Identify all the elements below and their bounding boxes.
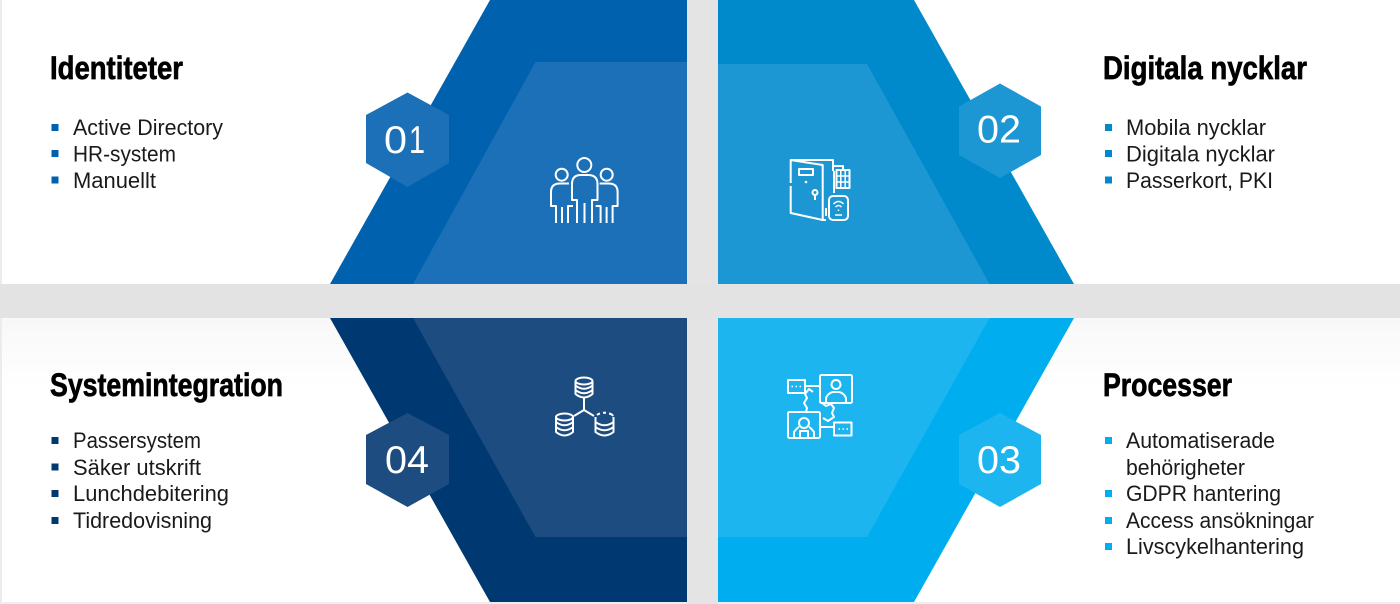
icon: group of people (551, 158, 618, 223)
list: Processer items: GDPR hantering (1126, 481, 1281, 506)
heading: Processer: Processer (1103, 367, 1232, 403)
list: Identiteter items: HR-system (73, 142, 176, 166)
list: Digitala nycklar items: Mobila nycklar (1126, 115, 1266, 140)
list: Processer items: Automatiserade (1126, 428, 1275, 453)
list: Processer items: behörigheter (1126, 455, 1245, 480)
shape: outer blue trapezoid 04 (330, 318, 687, 602)
heading: Digitala nycklar: Digitala nycklar (1103, 50, 1307, 86)
list: Digitala nycklar items (1105, 115, 1275, 193)
list: Identiteter items (52, 115, 223, 193)
panel: 03 Processer (718, 318, 1314, 602)
list: Processer items (1105, 428, 1314, 559)
shape: inner blue trapezoid 02 (718, 64, 990, 284)
hexagon badge 03: 03 (977, 439, 1021, 482)
hexagon badge 03 (959, 413, 1041, 507)
hexagon badge 01: 1 (409, 119, 425, 162)
list: Identiteter items: Active Directory (73, 115, 223, 140)
list: Processer items: Livscykelhantering (1126, 534, 1304, 559)
list: Systemintegration items (52, 428, 229, 533)
list: Identiteter items: Manuellt (73, 168, 156, 193)
hexagon badge 01 (366, 92, 449, 187)
list: Systemintegration items: Passersystem (73, 428, 201, 453)
list: Digitala nycklar items: Passerkort, PKI (1126, 168, 1273, 193)
hexagon badge 02: 02 (977, 108, 1021, 152)
panel: 02 Digitala nycklar (718, 0, 1307, 284)
hexagon badge 04: 04 (385, 439, 429, 482)
shape: outer blue trapezoid 02 (718, 0, 1074, 284)
shape: outer blue trapezoid 01 (330, 0, 687, 284)
icon: door with keypad and reader (791, 160, 850, 220)
list: Systemintegration items: Lunchdebitering (73, 481, 229, 506)
shape: outer blue trapezoid 03 (718, 318, 1074, 602)
list: Digitala nycklar items: Digitala nycklar (1126, 142, 1275, 166)
list: Processer items: Access ansökningar (1126, 508, 1314, 533)
heading: Identiteter: Identiteter (50, 50, 183, 86)
list: Systemintegration items: Tidredovisning (73, 508, 212, 533)
shape: inner blue trapezoid 01 (413, 62, 687, 284)
icon: connected databases (556, 378, 614, 436)
hexagon badge 01: 0 (384, 119, 407, 162)
shape: inner blue trapezoid 03 (718, 318, 990, 537)
hexagon badge 02 (959, 84, 1041, 178)
panel: 04 Systemintegration (50, 318, 687, 602)
icon: automated process with profiles (788, 375, 852, 438)
panel: 01 Identiteter (50, 0, 687, 284)
list: Systemintegration items: Säker utskrift (73, 455, 201, 480)
hexagon badge 04 (366, 413, 449, 507)
shape: inner blue trapezoid 04 (413, 318, 687, 537)
heading: Systemintegration: Systemintegration (50, 367, 283, 403)
